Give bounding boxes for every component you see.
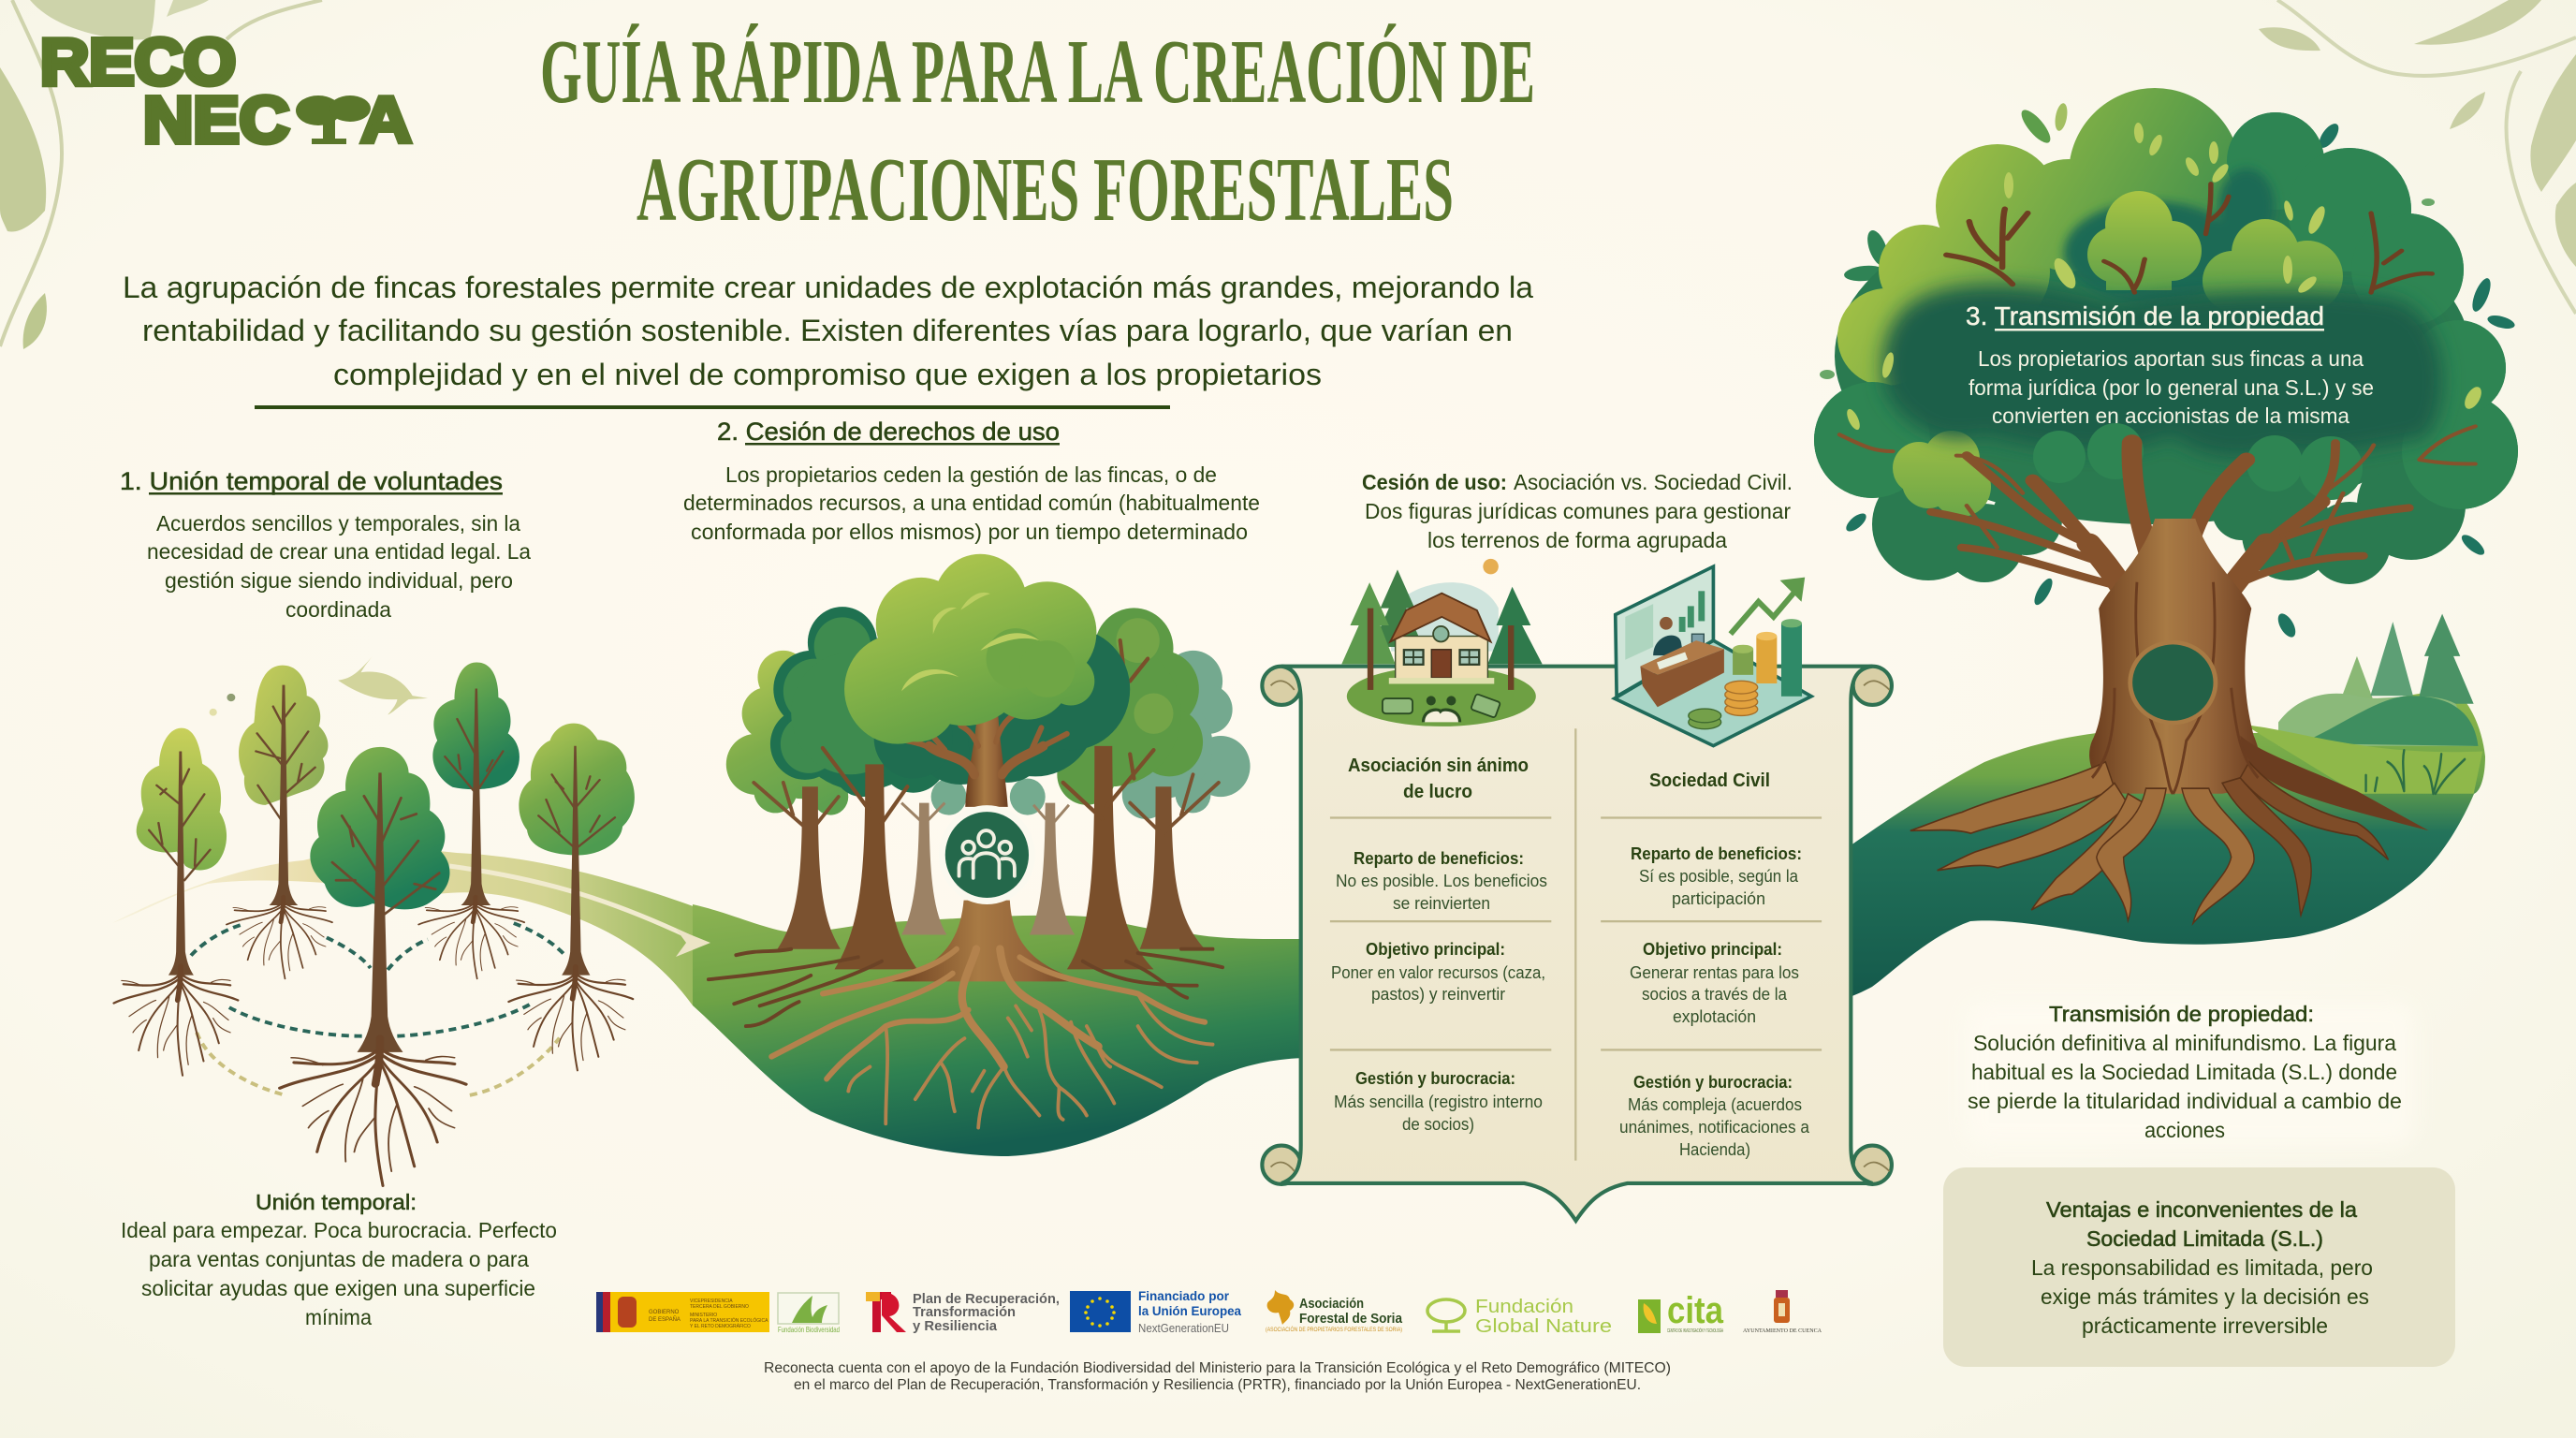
logo: Fundación Biodiversidad: Fundación Biodiversidad (778, 1326, 840, 1334)
column: Sociedad Civil: participación (1672, 888, 1765, 908)
logo: Reconecta: RECO (40, 25, 236, 98)
column: Sociedad Civil: Sí es posible, según la (1639, 866, 1799, 886)
logo: Gobierno de España: PARA LA TRANSICIÓN ECOLÓGICA (690, 1317, 768, 1324)
logo: Asociación Forestal de Soria (1266, 1290, 1403, 1333)
arrow (676, 929, 710, 957)
section 1 text: necesidad de crear una entidad legal. La (147, 539, 531, 564)
callout: pros and cons of the S.L.: Ventajas e inconvenientes de la (2046, 1197, 2357, 1222)
section 1 text: Acuerdos sencillos y temporales, sin la (156, 511, 520, 536)
logo: Ayuntamiento de Cuenca (1743, 1290, 1822, 1334)
column: Sociedad Civil: unánimes, notificaciones a (1619, 1117, 1810, 1137)
column: Sociedad Civil: explotación (1673, 1006, 1756, 1026)
logo: Unión Europea: Financiado por (1138, 1288, 1230, 1303)
tree: back right (418, 663, 524, 978)
logo: Asociación Forestal de Soria: (ASOCIACIÓN DE PROPIETARIOS FORESTALES DE SORIA) (1266, 1327, 1402, 1333)
column: Sociedad Civil: Reparto de beneficios: (1631, 844, 1802, 863)
comparison intro text: Cesión de uso: (1362, 470, 1507, 494)
back trees (901, 779, 1075, 935)
column: Asociación sin ánimo de lucro: Objetivo principal: (1366, 939, 1505, 959)
comparison intro text: Dos figuras jurídicas comunes para gestionar (1365, 499, 1791, 523)
title: GUÍA RÁPIDA PARA LA CREACIÓN DE (540, 22, 1535, 122)
trunk and roots (1910, 519, 2429, 923)
column: Sociedad Civil: Más compleja (acuerdos (1628, 1094, 1802, 1114)
intro paragraph: rentabilidad y facilitando su gestión sostenible. Existen diferentes vías para lograrlo, que varían en (142, 314, 1513, 347)
right dark tree (1039, 608, 1203, 969)
section 2 text (683, 462, 1260, 544)
icon: house in the forest (1341, 559, 1543, 726)
panel: comparison scroll (1262, 559, 1892, 1221)
canopy branches (1946, 183, 2432, 292)
tree: far right (508, 724, 635, 1070)
transmission of property text: Solución definitiva al minifundismo. La figura (1973, 1031, 2396, 1055)
section 3 text on the canopy: Los propietarios aportan sus fincas a una (1978, 346, 2364, 371)
transmission of property text: Transmisión de propiedad: (2049, 1002, 2314, 1026)
section 2 text: Los propietarios ceden la gestión de las fincas, o de (725, 462, 1217, 487)
column: Asociación sin ánimo de lucro: Poner en valor recursos (caza, (1331, 962, 1545, 982)
scenery: pines and hills (2245, 614, 2482, 794)
section 2 text: determinados recursos, a una entidad común (habitualmente (683, 491, 1260, 515)
union temporal text: para ventas conjuntas de madera o para (149, 1247, 529, 1271)
title: AGRUPACIONES FORESTALES (637, 139, 1454, 240)
comparison intro text: Asociación vs. Sociedad Civil. (1514, 470, 1793, 494)
comparison intro text: los terrenos de forma agrupada (1427, 528, 1727, 552)
decoration: top-right leaves (2259, 0, 2576, 314)
union temporal text: solicitar ayudas que exigen una superficie (141, 1276, 535, 1300)
logo: Gobierno de España: DE ESPAÑA (649, 1316, 681, 1323)
column: Sociedad Civil: Objetivo principal: (1643, 939, 1782, 959)
section 3 text on the canopy (1966, 301, 2374, 428)
section 3 text on the canopy: 3. Transmisión de la propiedad (1966, 301, 2324, 330)
canopy base (1814, 112, 2518, 584)
section 2 text: conformada por ellos mismos) por un tiempo determinado (691, 520, 1248, 544)
section 2 heading: 2. Cesión de derechos de uso (717, 418, 1060, 446)
section 1 heading: 1. Unión temporal de voluntades (120, 467, 503, 495)
decoration: top-left leaves (0, 0, 322, 349)
union temporal text: Unión temporal: (256, 1190, 417, 1214)
logo: Plan de Recuperación: y Resiliencia (913, 1319, 998, 1334)
logo: Plan de Recuperación: Plan de Recuperación, (913, 1292, 1060, 1307)
logo: Asociación Forestal de Soria: Asociación (1299, 1296, 1364, 1312)
far left tree (726, 651, 855, 949)
logo: Plan de Recuperación (866, 1292, 1060, 1334)
section 1 text: coordinada (285, 597, 391, 622)
column: Sociedad Civil: Gestión y burocracia: (1633, 1072, 1793, 1092)
small scattered leaves (1820, 102, 2516, 640)
logo: Asociación Forestal de Soria: Forestal de Soria (1299, 1311, 1403, 1327)
logo: Gobierno de España: GOBIERNO (649, 1310, 680, 1315)
logo: Reconecta: NEC (143, 83, 289, 156)
illustration: large tree with deep roots (1814, 88, 2518, 923)
tree: centre (280, 747, 466, 1186)
logo: Unión Europea: NextGenerationEU (1138, 1321, 1229, 1335)
logo: CITA (1638, 1290, 1724, 1334)
inner bushes (2087, 191, 2343, 323)
callout: pros and cons of the S.L. (1943, 1167, 2455, 1367)
callout: pros and cons of the S.L.: prácticamente irreversible (2082, 1313, 2328, 1338)
logo: Unión Europea: la Unión Europea (1138, 1303, 1241, 1318)
knot circle (2128, 640, 2217, 725)
transmission of property text: habitual es la Sociedad Limitada (S.L.) donde (1971, 1060, 2397, 1084)
transmission of property text (1966, 1002, 2415, 1147)
column: Asociación sin ánimo de lucro: Asociación sin ánimo (1348, 756, 1529, 776)
column: Asociación sin ánimo de lucro: de lucro (1403, 782, 1472, 802)
logo: Reconecta (40, 25, 412, 156)
left dark tree (770, 607, 946, 969)
column: Sociedad Civil: socios a través de la (1642, 984, 1788, 1004)
logo: Unión Europea (1070, 1288, 1241, 1335)
column: Asociación sin ánimo de lucro: pastos) y reinvertir (1371, 984, 1505, 1004)
logo: Gobierno de España: MINISTERIO (690, 1313, 717, 1318)
column: Sociedad Civil (1619, 770, 1810, 1159)
intro paragraph (123, 271, 1534, 391)
scroll parchment (1262, 667, 1892, 1221)
column: Asociación sin ánimo de lucro: de socios) (1402, 1114, 1474, 1134)
logo: Fundación Global Nature (1427, 1297, 1612, 1337)
logo: Gobierno de España: Y EL RETO DEMOGRÁFICO (690, 1323, 751, 1329)
logo: Fundación Global Nature: Fundación (1475, 1297, 1573, 1317)
logo: Gobierno de España: TERCERA DEL GOBIERNO (690, 1304, 749, 1310)
illustration: grove of trees sharing roots (709, 554, 1251, 1128)
union temporal text: Ideal para empezar. Poca burocracia. Perfecto (121, 1218, 557, 1242)
transmission of property text: acciones (2144, 1118, 2225, 1142)
column: Asociación sin ánimo de lucro: Más sencilla (registro interno (1334, 1092, 1543, 1111)
column: Asociación sin ánimo de lucro: Gestión y burocracia: (1355, 1068, 1515, 1088)
column: Sociedad Civil: Hacienda) (1679, 1139, 1750, 1159)
icon: logo tree (296, 95, 371, 144)
callout: pros and cons of the S.L.: Sociedad Limitada (S.L.) (2086, 1226, 2323, 1251)
title (540, 22, 1535, 240)
column: Asociación sin ánimo de lucro: No es posible. Los beneficios (1336, 871, 1547, 890)
footer credits: en el marco del Plan de Recuperación, Transformación y Resiliencia (PRTR), financiado por la Unión Europea - NextGenerationEU. (794, 1377, 1641, 1393)
illustration: five young trees with connected roots (114, 656, 635, 1186)
main tree canopy and branches (844, 554, 1130, 807)
floating leaf (338, 656, 428, 714)
logo: Ayuntamiento de Cuenca: AYUNTAMIENTO DE CUENCA (1743, 1328, 1822, 1334)
logos row (596, 1288, 1822, 1337)
callout: pros and cons of the S.L.: exige más trámites y la decisión es (2041, 1284, 2369, 1309)
column: Sociedad Civil: Sociedad Civil (1649, 770, 1770, 791)
section 3 text on the canopy: convierten en accionistas de la misma (1992, 404, 2350, 428)
icon: office with growth chart (1615, 566, 1811, 746)
logo: CITA: CENTRO DE INVESTIGACIÓN Y TECNOLOGÍA (1667, 1328, 1723, 1334)
column: Asociación sin ánimo de lucro: Reparto de beneficios: (1354, 848, 1524, 868)
section 1 text: gestión sigue siendo individual, pero (165, 568, 513, 593)
union temporal text (121, 1190, 557, 1329)
footer credits (764, 1360, 1671, 1393)
connecting dashed lines (191, 923, 565, 1036)
union temporal text: mínima (305, 1305, 372, 1329)
column: Asociación sin ánimo de lucro: se reinvierten (1393, 893, 1490, 913)
intro paragraph: complejidad y en el nivel de compromiso que exigen a los propietarios (333, 358, 1322, 391)
callout: pros and cons of the S.L.: La responsabilidad es limitada, pero (2031, 1255, 2373, 1280)
logo: Reconecta: A (360, 83, 412, 156)
icon: people in a circle (939, 805, 1035, 904)
logo: Gobierno de España (596, 1292, 769, 1332)
far right tree (1110, 651, 1251, 949)
column: Sociedad Civil: Generar rentas para los (1630, 962, 1799, 982)
logo: Gobierno de España: VICEPRESIDENCIA (690, 1299, 733, 1304)
ribbon: path connecting the three stages (112, 688, 2485, 1156)
light foliage (1837, 88, 2241, 386)
section 1 text (147, 511, 531, 622)
intro paragraph: La agrupación de fincas forestales permite crear unidades de explotación más grandes, mejorando la (123, 271, 1534, 304)
logo: Fundación Global Nature: Global Nature (1475, 1316, 1612, 1337)
tree: back left (227, 666, 332, 978)
section 3 text on the canopy: forma jurídica (por lo general una S.L.) y se (1969, 375, 2374, 400)
footer credits: Reconecta cuenta con el apoyo de la Fundación Biodiversidad del Ministerio para la Transición Ecológica y el Reto Demográfico (MITECO) (764, 1360, 1671, 1376)
transmission of property text: se pierde la titularidad individual a cambio de (1968, 1089, 2402, 1113)
main trunk and roots (709, 901, 1222, 1128)
logo: Plan de Recuperación: Transformación (913, 1305, 1016, 1320)
comparison intro text (1362, 470, 1793, 552)
logo: Fundación Biodiversidad (778, 1293, 840, 1334)
column: Asociación sin ánimo de lucro (1331, 756, 1547, 1134)
tree: far left (114, 728, 238, 1076)
pale leaves in canopy (1844, 123, 2485, 432)
logo: CITA: cita (1667, 1290, 1724, 1331)
canopy dark centre behind the text (1882, 285, 2443, 457)
